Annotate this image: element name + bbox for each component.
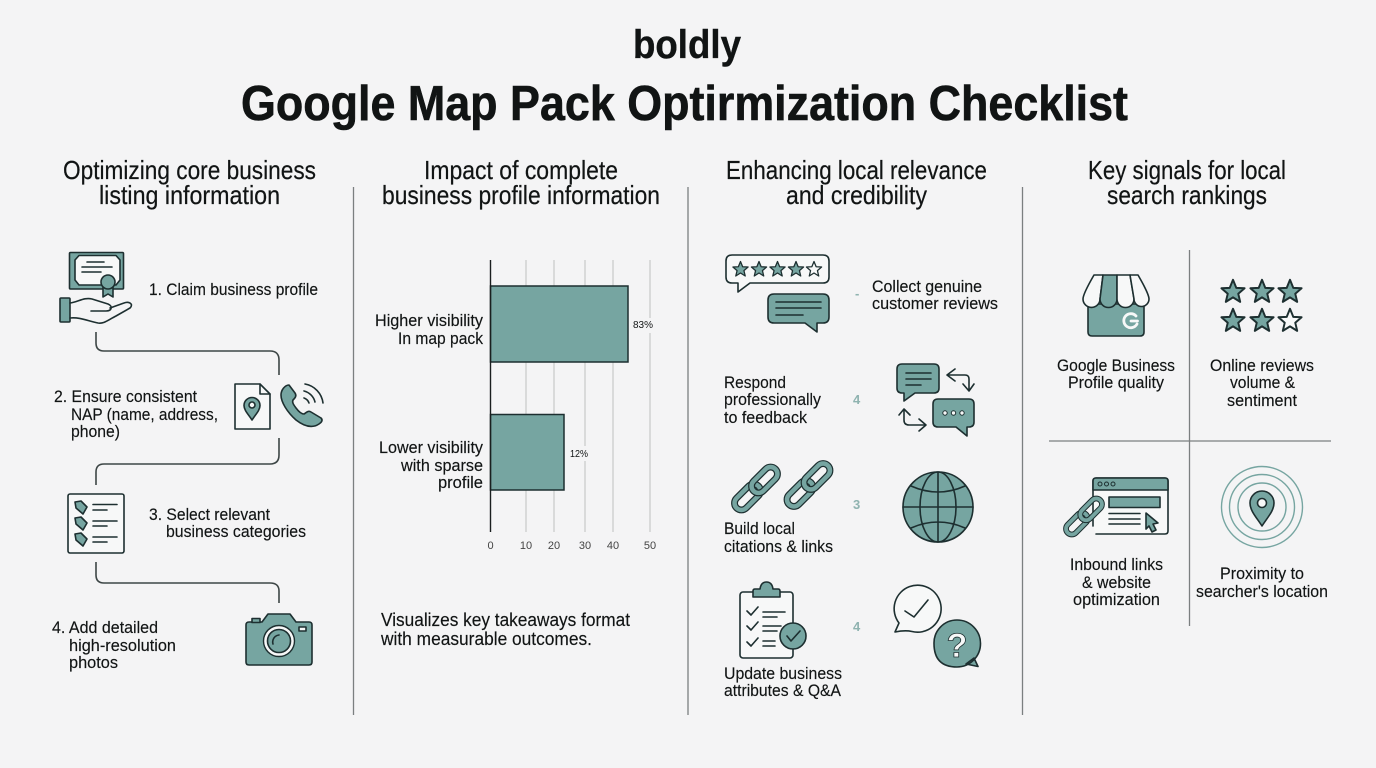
text: citations [724,519,833,556]
connector arrow 2 [96,438,279,485]
icon: citation chain links [732,461,833,513]
panel: local relevance and credibility [724,155,998,700]
text: respond to feedback: Respond [724,373,786,392]
text: attributes: attributes & Q&A [724,681,842,700]
label: lower visibility: with sparse [400,456,483,475]
x axis labels [487,540,656,552]
connector arrow 3 [96,562,279,603]
x axis labels: 30 [579,540,591,552]
icon: chat exchange [897,364,974,436]
heading: local relevance: and credibility [786,180,927,210]
text: inbound links [1070,555,1163,609]
label: lower visibility [379,438,483,492]
bar chart [375,260,656,552]
icon: review bubbles [726,255,829,332]
connector arrow 1 [96,332,279,375]
panel: key ranking signals [1049,155,1331,626]
step 4 text [52,618,176,672]
step 2 text: NAP (name, address, [71,405,218,424]
text: attributes [724,664,842,700]
heading: profile impact: Impact of complete [424,155,618,185]
text: respond to feedback [724,373,821,427]
text: online reviews: Online reviews [1210,356,1314,375]
label: lower visibility: Lower visibility [379,438,483,457]
text: online reviews: sentiment [1227,391,1297,410]
panel: profile impact [375,155,660,649]
x axis labels: 0 [487,540,494,552]
text: profile quality [1057,356,1175,392]
heading: core business listing [63,155,316,210]
text: proximity: searcher's location [1196,582,1328,601]
label: higher visibility [375,311,483,348]
marker: 3: 3 [853,497,860,512]
step 2 text: phone) [71,422,120,441]
text: inbound links: & website [1082,573,1151,592]
marker: 4: 4 [853,392,861,407]
text: respond to feedback: to feedback [724,408,807,427]
label: lower visibility: profile [438,473,483,492]
step 2 text: 2. Ensure consistent [54,387,197,406]
text: attributes: Update business [724,664,842,683]
icon: clipboard checklist [740,582,806,658]
marker: 4: 4 [853,619,861,634]
x axis labels: 20 [548,540,560,552]
bar: higher visibility [490,286,628,362]
icon: globe [903,472,973,542]
text: inbound links: Inbound links [1070,555,1163,574]
title: Google Map Pack Optirmization Checklist [241,77,1128,131]
step 1 text: 1. Claim business profile [149,280,318,299]
step 3 text [149,505,306,541]
text: collect reviews [872,277,998,313]
icon: check and question bubbles [894,585,980,667]
bar: lower visibility [490,414,564,490]
icon: location rings [1222,466,1302,548]
heading: local relevance [726,155,987,210]
icon: category checklist [68,494,124,553]
step 2 text [54,387,218,441]
icon: phone with signal [281,384,323,426]
icon: camera [246,614,312,665]
icon: storefront [1083,275,1149,336]
text: respond to feedback: professionally [724,390,821,409]
label: higher visibility: Higher visibility [375,311,483,330]
chart caption [380,610,630,649]
text: online reviews [1210,356,1314,410]
chart caption: Visualizes key takeaways format [381,610,630,630]
heading: core business listing: listing information [99,180,280,210]
step 4 text: 4. Add detailed [52,618,158,637]
heading: key signals: search rankings [1107,180,1267,210]
text: citations: citations & links [724,537,833,556]
step 4 text: photos [69,653,118,672]
icon: check and question bubbles: ? [947,627,967,665]
text: profile quality: Profile quality [1068,373,1164,392]
label: higher visibility: In map pack [398,329,483,348]
text: collect reviews: Collect genuine [872,277,982,296]
text: citations: Build local [724,519,795,538]
step 3 text: business categories [166,522,306,541]
x axis labels: 50 [644,540,656,552]
x axis labels: 40 [607,540,619,552]
text: collect reviews: customer reviews [872,294,998,313]
brand logo: boldly: boldly [633,23,742,67]
chart caption: with measurable outcomes. [380,629,592,649]
text: profile quality: Google Business [1057,356,1175,375]
text: proximity [1196,564,1328,601]
heading: key signals [1088,155,1286,210]
text: online reviews: volume & [1230,373,1296,392]
heading: key signals: Key signals for local [1088,155,1286,185]
heading: local relevance: Enhancing local relevance [726,155,987,185]
value: 83%: 83% [633,319,653,331]
icon: browser with link [1064,478,1168,537]
text: proximity: Proximity to [1220,564,1304,583]
x axis labels: 10 [520,540,532,552]
heading: core business listing: Optimizing core business [63,155,316,185]
heading: profile impact: business profile information [382,180,660,210]
heading: profile impact [382,155,660,210]
marker: dash: - [855,286,859,301]
value: 12%: 12% [570,448,588,460]
icon: rating stars [1221,280,1302,331]
step 3 text: 3. Select relevant [149,505,270,524]
step 4 text: high-resolution [69,636,176,655]
icon: certificate in hand [60,252,131,323]
panel: core business listing [52,155,323,672]
text: inbound links: optimization [1073,590,1160,609]
icon: document with pin [235,384,270,429]
